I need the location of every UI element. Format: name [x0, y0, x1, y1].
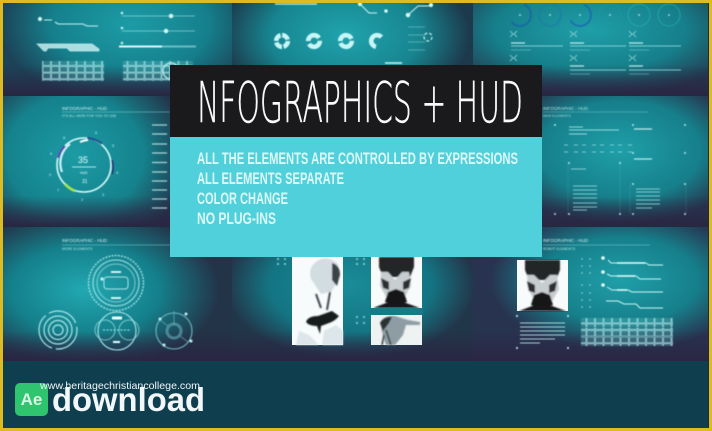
ring tick numbers	[49, 130, 119, 202]
ring centre readout: 31	[82, 179, 88, 185]
feature lines: COLOR CHANGE	[197, 190, 288, 208]
heading: MORE ELEMENTS	[62, 247, 93, 251]
heading	[543, 238, 650, 251]
tri-node dial	[156, 311, 192, 349]
ring tick numbers: 0	[49, 172, 52, 177]
ring tick numbers: 3	[102, 192, 105, 197]
concentric dial	[39, 311, 77, 349]
ring row	[506, 1, 680, 29]
heading: INFOGRAPHIC - HUD	[543, 106, 589, 111]
heading	[543, 106, 648, 118]
heading	[62, 238, 170, 251]
feature lines: ALL ELEMENTS SEPARATE	[197, 170, 344, 188]
keyboard left	[42, 61, 104, 81]
dot grid	[581, 258, 591, 308]
icon: Ae badge	[15, 383, 48, 416]
ring tick numbers: 8	[63, 135, 66, 140]
ring tick numbers: 6	[95, 130, 98, 135]
circuit line	[38, 17, 98, 26]
corner dots	[554, 124, 686, 215]
large dial	[88, 256, 144, 310]
ring chart	[57, 138, 113, 192]
heading: ROBOT ELEMENTS	[543, 247, 576, 251]
side list	[152, 125, 167, 208]
crosshair marks	[277, 258, 365, 324]
text block	[516, 315, 569, 349]
download wordmark: download	[52, 381, 205, 418]
panel: top-left HUD widgets	[37, 12, 196, 81]
teal gap bar	[370, 308, 423, 315]
slider 1	[121, 12, 195, 18]
bracket shape	[37, 44, 99, 51]
bottom line	[385, 62, 402, 64]
feature lines	[197, 150, 518, 228]
watermark url: www.heritagechristiancollege.com	[39, 380, 200, 392]
panel: top-middle rings	[275, 2, 433, 63]
ring tick numbers: 2	[81, 197, 84, 202]
panel: bottom-left dials	[39, 238, 192, 350]
keyboard	[581, 318, 673, 346]
ring gauges	[276, 34, 384, 48]
heading	[62, 106, 170, 118]
crosshair dial	[95, 312, 139, 350]
heading: INFOGRAPHIC - HUD	[543, 238, 589, 243]
circuit bars	[601, 256, 663, 308]
title card: black header	[170, 65, 542, 137]
icon: Ae badge: Ae	[21, 390, 42, 409]
dial circle	[163, 63, 179, 79]
feature lines: ALL THE ELEMENTS ARE CONTROLLED BY EXPRESSIONS	[197, 150, 518, 168]
ring tick numbers: 1	[57, 187, 60, 192]
panel: middle-right text blocks	[543, 106, 686, 215]
photo: robot front right	[517, 260, 568, 311]
panel: bottom-middle robot photos	[277, 257, 423, 345]
slider 2	[121, 27, 195, 33]
heading: NEW ELEMENTS	[543, 114, 572, 118]
text box lines	[564, 127, 686, 214]
feature lines: NO PLUG-INS	[197, 210, 276, 228]
keyboard right	[123, 61, 193, 81]
top circuit lines	[275, 2, 433, 17]
heading: IT'S ALL HERE FOR YOU TO USE	[62, 114, 117, 118]
bottom band	[3, 361, 708, 428]
panel: top-right rings and stats	[506, 1, 681, 74]
ring centre readout: HUD	[80, 171, 88, 175]
panel: middle-left ring chart	[49, 106, 170, 208]
slider 3	[119, 42, 196, 46]
heading: INFOGRAPHIC - HUD	[62, 238, 108, 243]
panel: bottom-right robot and keyboard	[516, 238, 673, 349]
ring tick numbers: 5	[112, 143, 115, 148]
small gauges list	[408, 27, 432, 50]
ring centre readout: 35	[78, 155, 88, 165]
photo: robot front top	[371, 257, 422, 308]
heading: INFOGRAPHIC - HUD	[62, 106, 108, 111]
ring tick numbers: 4	[116, 170, 119, 175]
ring tick numbers: 9	[50, 151, 53, 156]
title card: cyan feature list	[170, 137, 542, 257]
ring centre readout	[72, 155, 96, 185]
stat blocks	[510, 31, 681, 74]
photo: robot profile	[292, 257, 343, 345]
photo: robot side bottom	[371, 315, 422, 345]
